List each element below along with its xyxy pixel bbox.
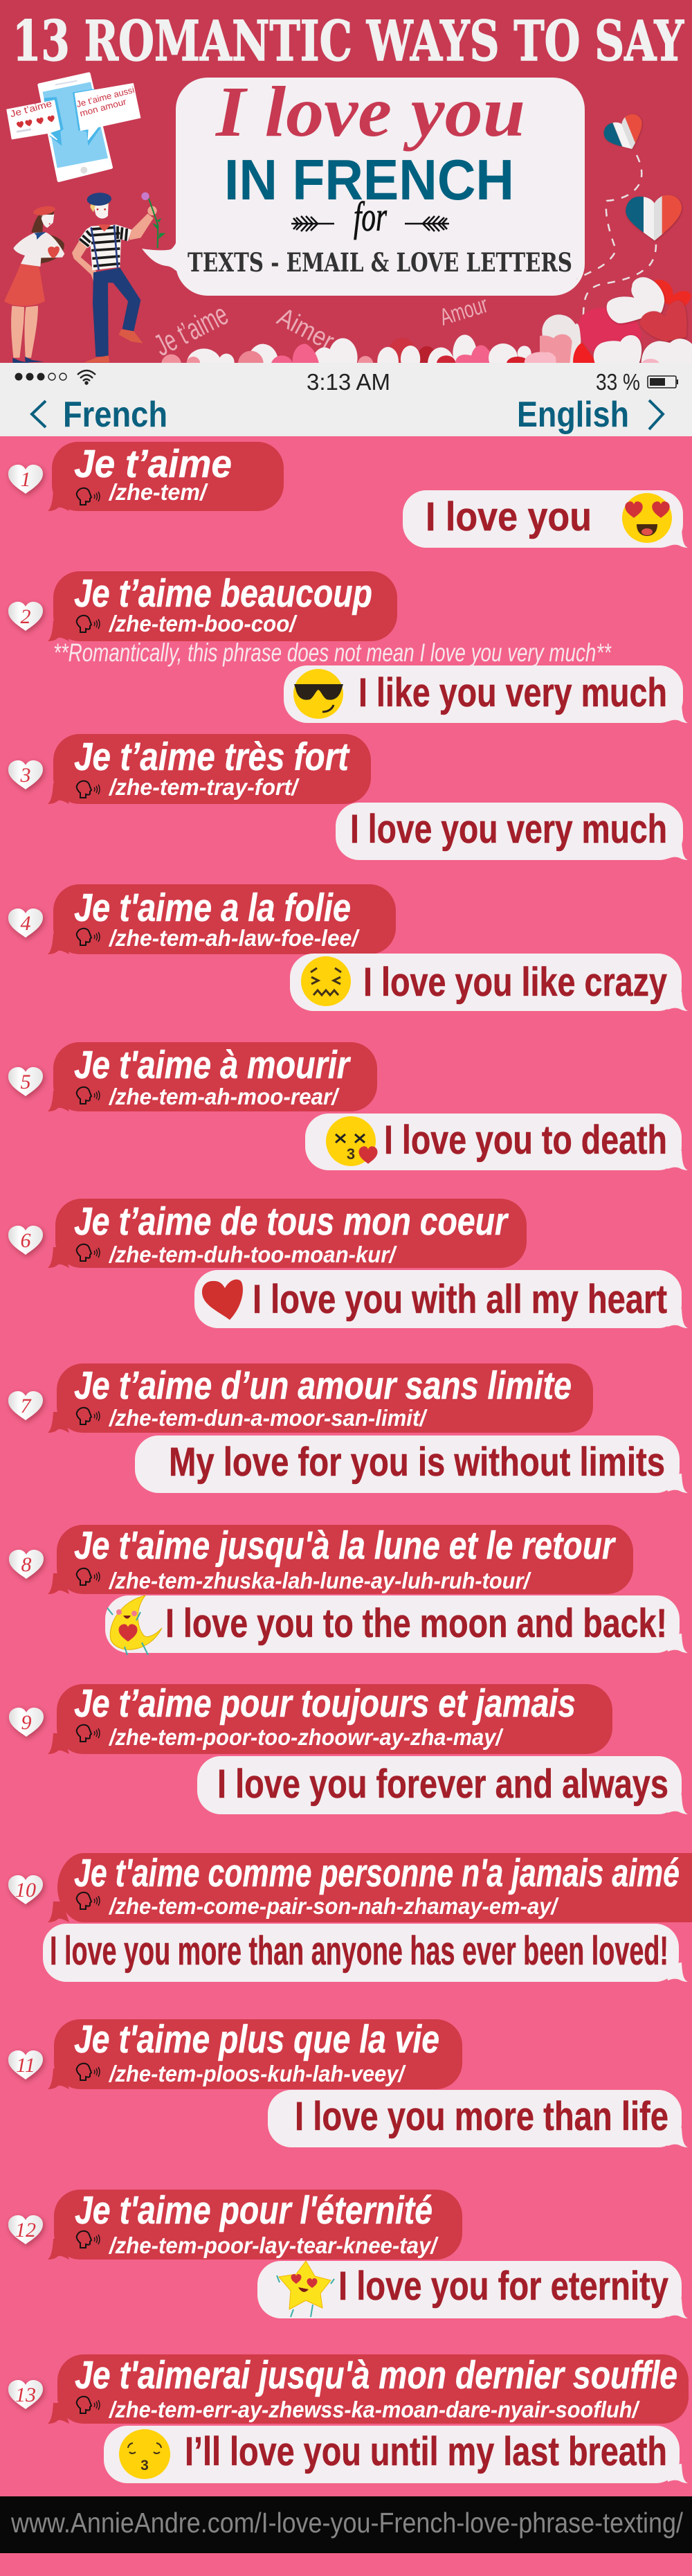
label french: French	[63, 395, 167, 435]
phrase 1	[8, 442, 688, 548]
english bubble 4	[290, 954, 688, 1011]
emoji: crazy face	[301, 956, 351, 1006]
script heading: I love you	[215, 72, 525, 152]
french bubble 9: /zhe-tem-poor-too-zhoowr-ay-zha-may/	[108, 1724, 504, 1750]
emoji: kissing face	[119, 2429, 170, 2479]
illustration: mime couple	[4, 192, 165, 363]
status and navigation bar	[0, 363, 692, 436]
phrase 6	[8, 1199, 688, 1328]
english bubble 1: I love you	[426, 494, 592, 539]
number heart 3: 3	[19, 764, 30, 787]
illustration: phone with chat bubbles: Je t’aime	[9, 98, 53, 119]
phrase 10	[8, 1851, 692, 1982]
number heart 3	[8, 760, 43, 789]
number heart 8	[9, 1550, 44, 1579]
number heart 2: 2	[21, 605, 30, 628]
number heart 1	[8, 465, 43, 494]
french bubble 8	[48, 1523, 633, 1594]
french bubble 2: Je t’aime beaucoup	[74, 571, 372, 616]
french bubble 5: /zhe-tem-ah-moo-rear/	[108, 1084, 340, 1109]
phrase 3	[8, 734, 688, 860]
emoji: star	[277, 2261, 334, 2317]
number heart 12: 12	[15, 2219, 36, 2242]
french bubble 12: /zhe-tem-poor-lay-tear-knee-tay/	[108, 2233, 439, 2258]
arrow right	[405, 216, 449, 231]
phrase 7	[8, 1363, 688, 1493]
forward chevron	[649, 400, 663, 429]
paper hearts, bottom row	[161, 334, 556, 363]
phrase 9	[9, 1681, 688, 1814]
french bubble 5	[48, 1042, 377, 1111]
french bubble 7: /zhe-tem-dun-a-moor-san-limit/	[108, 1405, 428, 1431]
speech bubble panel	[142, 72, 585, 296]
french bubble 3	[48, 734, 371, 804]
english bubble 1	[403, 490, 688, 548]
english bubble 2	[284, 665, 688, 723]
french bubble 13: /zhe-tem-err-ay-zhewss-ka-moan-dare-nyair-soofluh/	[108, 2397, 641, 2422]
floating word: aimer: Aimer	[273, 303, 339, 356]
paper hearts, right cluster	[540, 277, 692, 364]
english bubble 12	[257, 2261, 688, 2318]
number heart 1: 1	[21, 468, 30, 491]
number heart 7	[8, 1391, 43, 1420]
number heart 11	[8, 2050, 43, 2079]
back chevron	[32, 401, 46, 427]
floating word: amour: Amour	[437, 292, 491, 331]
french bubble 12	[48, 2188, 462, 2260]
heading: in french: IN FRENCH	[224, 147, 514, 212]
french bubble 5: Je t'aime à mourir	[74, 1043, 351, 1087]
french bubble 7: Je t’aime d’un amour sans limite	[74, 1363, 572, 1408]
french bubble 1	[48, 442, 284, 511]
french bubble 9: Je t’aime pour toujours et jamais	[74, 1681, 576, 1726]
woman	[4, 205, 64, 363]
english bubble 5	[305, 1113, 688, 1170]
french bubble 3: /zhe-tem-tray-fort/	[108, 774, 300, 800]
number heart 4: 4	[21, 912, 30, 935]
footer bar	[0, 2496, 692, 2553]
french bubble 6	[48, 1199, 527, 1268]
illustration: phone with chat bubbles	[7, 74, 140, 181]
dashed flight paths	[540, 155, 656, 345]
french bubble 6: Je t’aime de tous mon coeur	[74, 1199, 509, 1244]
french bubble 13	[48, 2353, 689, 2424]
clock: 3:13 AM	[307, 369, 390, 395]
number heart 2	[8, 602, 43, 631]
french bubble 6: /zhe-tem-duh-too-moan-kur/	[108, 1242, 398, 1267]
number heart 13	[8, 2380, 43, 2409]
emoji: sunglasses	[293, 669, 343, 719]
battery icon	[648, 376, 678, 388]
label english: English	[517, 395, 629, 435]
french bubble 1: /zhe-tem/	[108, 479, 209, 505]
number heart 4	[8, 909, 43, 938]
french bubble 3: Je t’aime très fort	[74, 735, 350, 779]
emoji: heart eyes	[622, 493, 672, 543]
number heart 8: 8	[21, 1553, 32, 1576]
number heart 10: 10	[15, 1879, 36, 1902]
for: for	[354, 194, 387, 240]
english bubble 6	[194, 1270, 688, 1328]
number heart 12	[8, 2215, 43, 2244]
number heart 10	[8, 1875, 43, 1904]
french flag hearts	[597, 108, 685, 244]
phrase 11	[8, 2017, 688, 2147]
illustration: phone with chat bubbles: Je t’aime aussi	[75, 85, 136, 109]
phrase 13	[8, 2353, 689, 2483]
emoji: kissing dizzy face: 3	[347, 1145, 355, 1163]
phrase 5	[8, 1042, 688, 1170]
phrase 8	[9, 1523, 688, 1655]
illustration: phone with chat bubbles: mon amour	[79, 97, 127, 118]
arrow left	[291, 216, 334, 231]
emoji: kissing dizzy face	[326, 1116, 378, 1166]
english bubble 13	[104, 2426, 688, 2483]
phrase 4	[8, 884, 688, 1011]
french bubble 10	[48, 1851, 692, 1922]
french bubble 2: /zhe-tem-boo-coo/	[108, 611, 298, 636]
emoji: moon	[107, 1595, 162, 1655]
number heart 11: 11	[16, 2054, 35, 2077]
number heart 5	[8, 1067, 43, 1096]
english bubble 8	[105, 1595, 688, 1655]
number heart 13: 13	[15, 2383, 36, 2406]
number heart 9	[9, 1708, 44, 1737]
french bubble 10: /zhe-tem-come-pair-son-nah-zhamay-em-ay/	[108, 1893, 560, 1919]
french bubble 4: /zhe-tem-ah-law-foe-lee/	[108, 925, 361, 951]
floating word: je t'aime: Je t’aime	[149, 297, 233, 363]
subtitle: TEXTS - EMAIL & LOVE LETTERS	[188, 247, 572, 278]
phrase 2	[8, 571, 688, 723]
emoji: kissing face: 3	[140, 2458, 149, 2474]
french bubble 4: Je t'aime a la folie	[74, 886, 351, 930]
header banner	[0, 0, 692, 381]
french bubble 2	[48, 571, 397, 641]
number heart 6: 6	[21, 1229, 30, 1252]
french bubble 9	[48, 1681, 612, 1754]
signal dots	[15, 373, 66, 381]
number heart 9: 9	[21, 1711, 32, 1734]
french bubble 4	[48, 884, 396, 954]
french bubble 11: /zhe-tem-ploos-kuh-lah-veey/	[108, 2061, 407, 2086]
french bubble 11	[48, 2017, 462, 2089]
battery percent: 33 %	[596, 369, 640, 395]
number heart 7: 7	[21, 1395, 32, 1417]
wifi icon	[78, 370, 95, 384]
number heart 6	[8, 1226, 43, 1255]
french bubble 1: Je t’aime	[74, 442, 232, 486]
french bubble 11: Je t'aime plus que la vie	[74, 2017, 439, 2061]
french bubble 7	[48, 1363, 593, 1433]
french bubble 8: /zhe-tem-zhuska-lah-lune-ay-luh-ruh-tour/	[108, 1568, 532, 1593]
man	[72, 192, 165, 362]
french bubble 12: Je t'aime pour l'éternité	[75, 2188, 432, 2233]
number heart 5: 5	[21, 1071, 30, 1093]
emoji: red heart	[202, 1280, 243, 1320]
phrase 12	[8, 2188, 688, 2318]
